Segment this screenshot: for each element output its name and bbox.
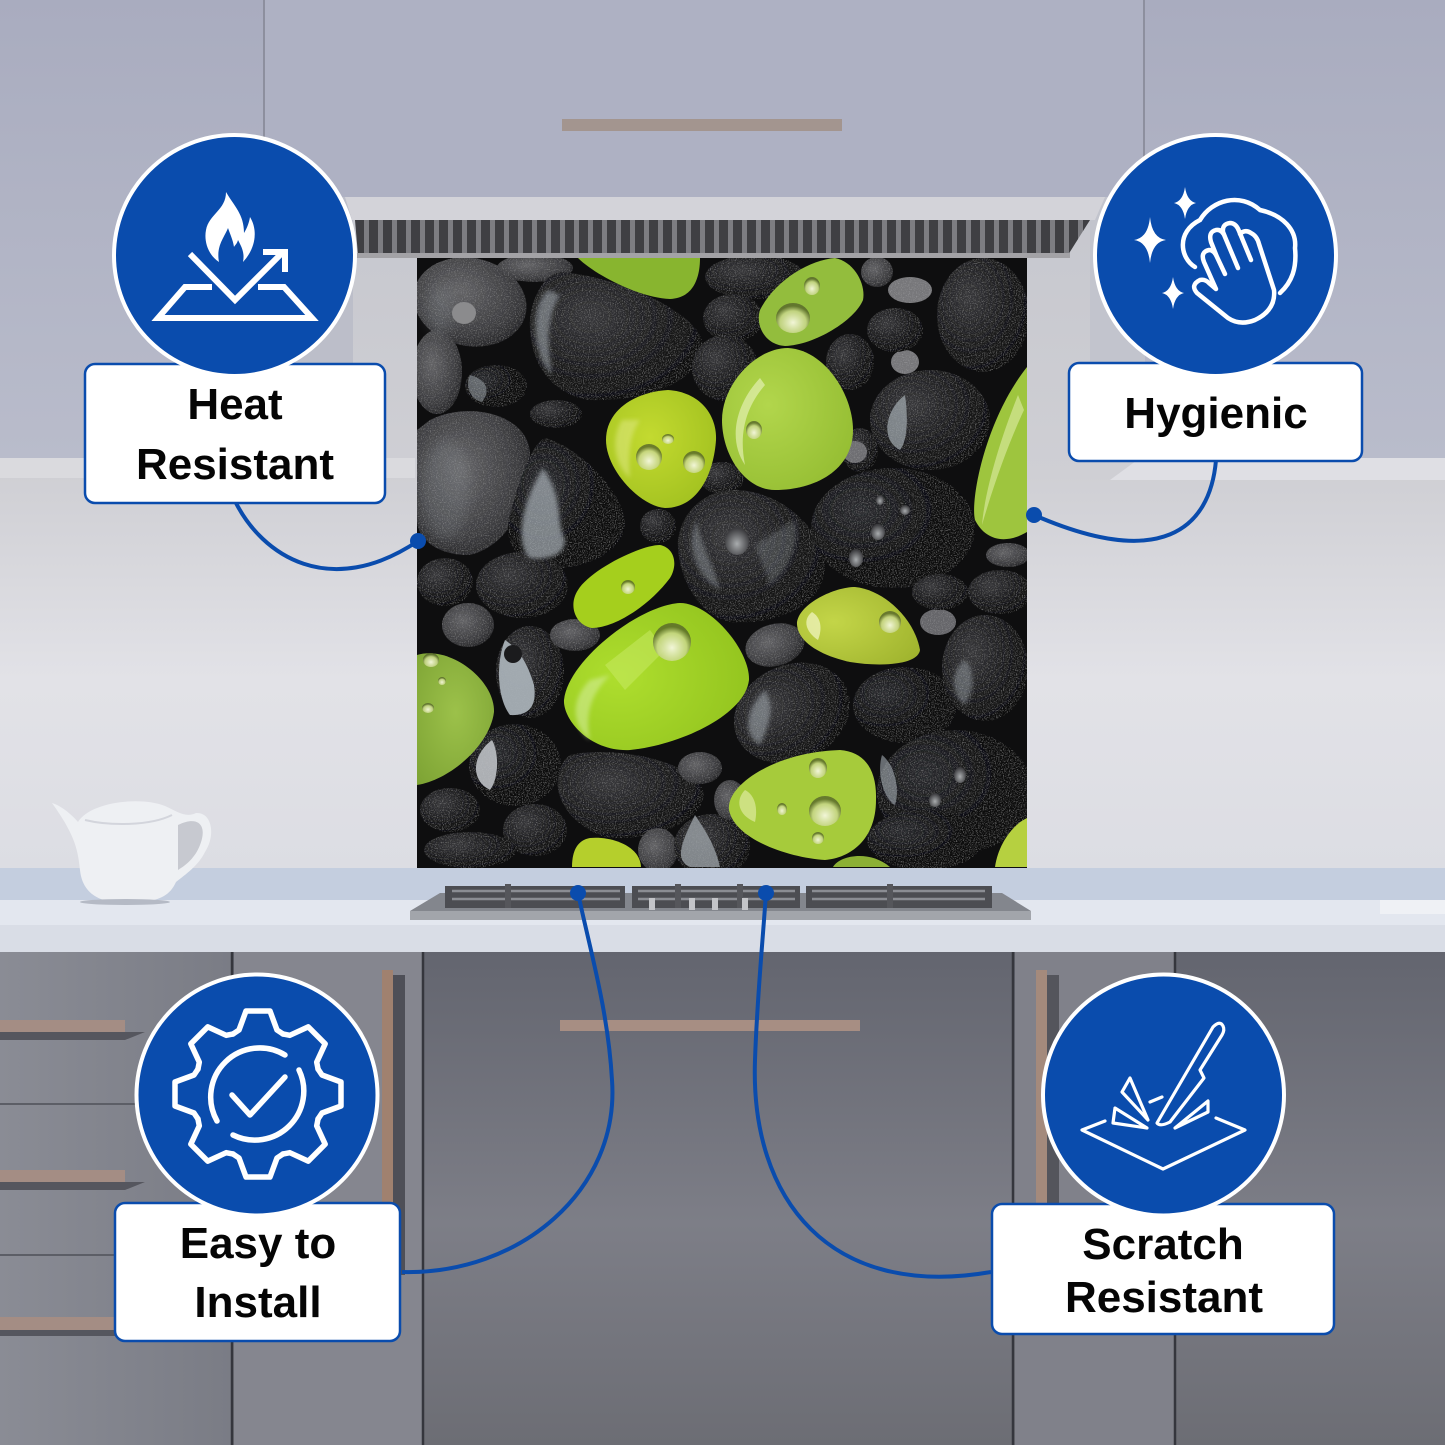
- label: heat resistant: Resistant: [136, 440, 334, 489]
- connector: heat resistant: [235, 501, 426, 569]
- label: hygienic: Hygienic: [1124, 389, 1308, 438]
- label: easy to install: Install: [194, 1278, 322, 1327]
- countertop: [0, 868, 1445, 952]
- right upper cabinet: [1145, 0, 1445, 458]
- water droplets: [422, 277, 966, 844]
- cabinet handles: [0, 970, 1059, 1336]
- label: scratch resistant: Scratch: [1082, 1220, 1244, 1269]
- hob: [410, 884, 1031, 920]
- badge: scratch resistant icon: [1043, 974, 1284, 1216]
- badge: easy to install icon: [136, 974, 378, 1216]
- connector: hygienic: [1026, 460, 1216, 541]
- splashback panel: pebbles: [405, 247, 1033, 878]
- glossy highlights on dark pebbles: [421, 286, 972, 867]
- left upper cabinet: [0, 0, 263, 458]
- label: easy to install: Easy to: [180, 1219, 336, 1268]
- badge: heat resistant icon: [114, 135, 355, 376]
- connector: scratch resistant: [755, 885, 991, 1277]
- badge: hygienic icon: [1095, 135, 1336, 376]
- label: heat resistant: [85, 364, 385, 503]
- label: hygienic: [1069, 363, 1362, 461]
- centre upper cabinet: [265, 0, 1143, 197]
- green pebbles: [417, 258, 1027, 867]
- cooker hood: [345, 197, 1105, 258]
- connector: easy to install: [402, 885, 612, 1272]
- label: heat resistant: Heat: [187, 380, 283, 429]
- label: easy to install: [115, 1203, 400, 1341]
- dark pebbles: [405, 247, 1033, 878]
- upper cabinet handle: [562, 119, 842, 131]
- label: scratch resistant: [992, 1204, 1334, 1334]
- label: scratch resistant: Resistant: [1065, 1273, 1263, 1322]
- teapot: [52, 801, 211, 905]
- lower cabinets: [0, 952, 1445, 1445]
